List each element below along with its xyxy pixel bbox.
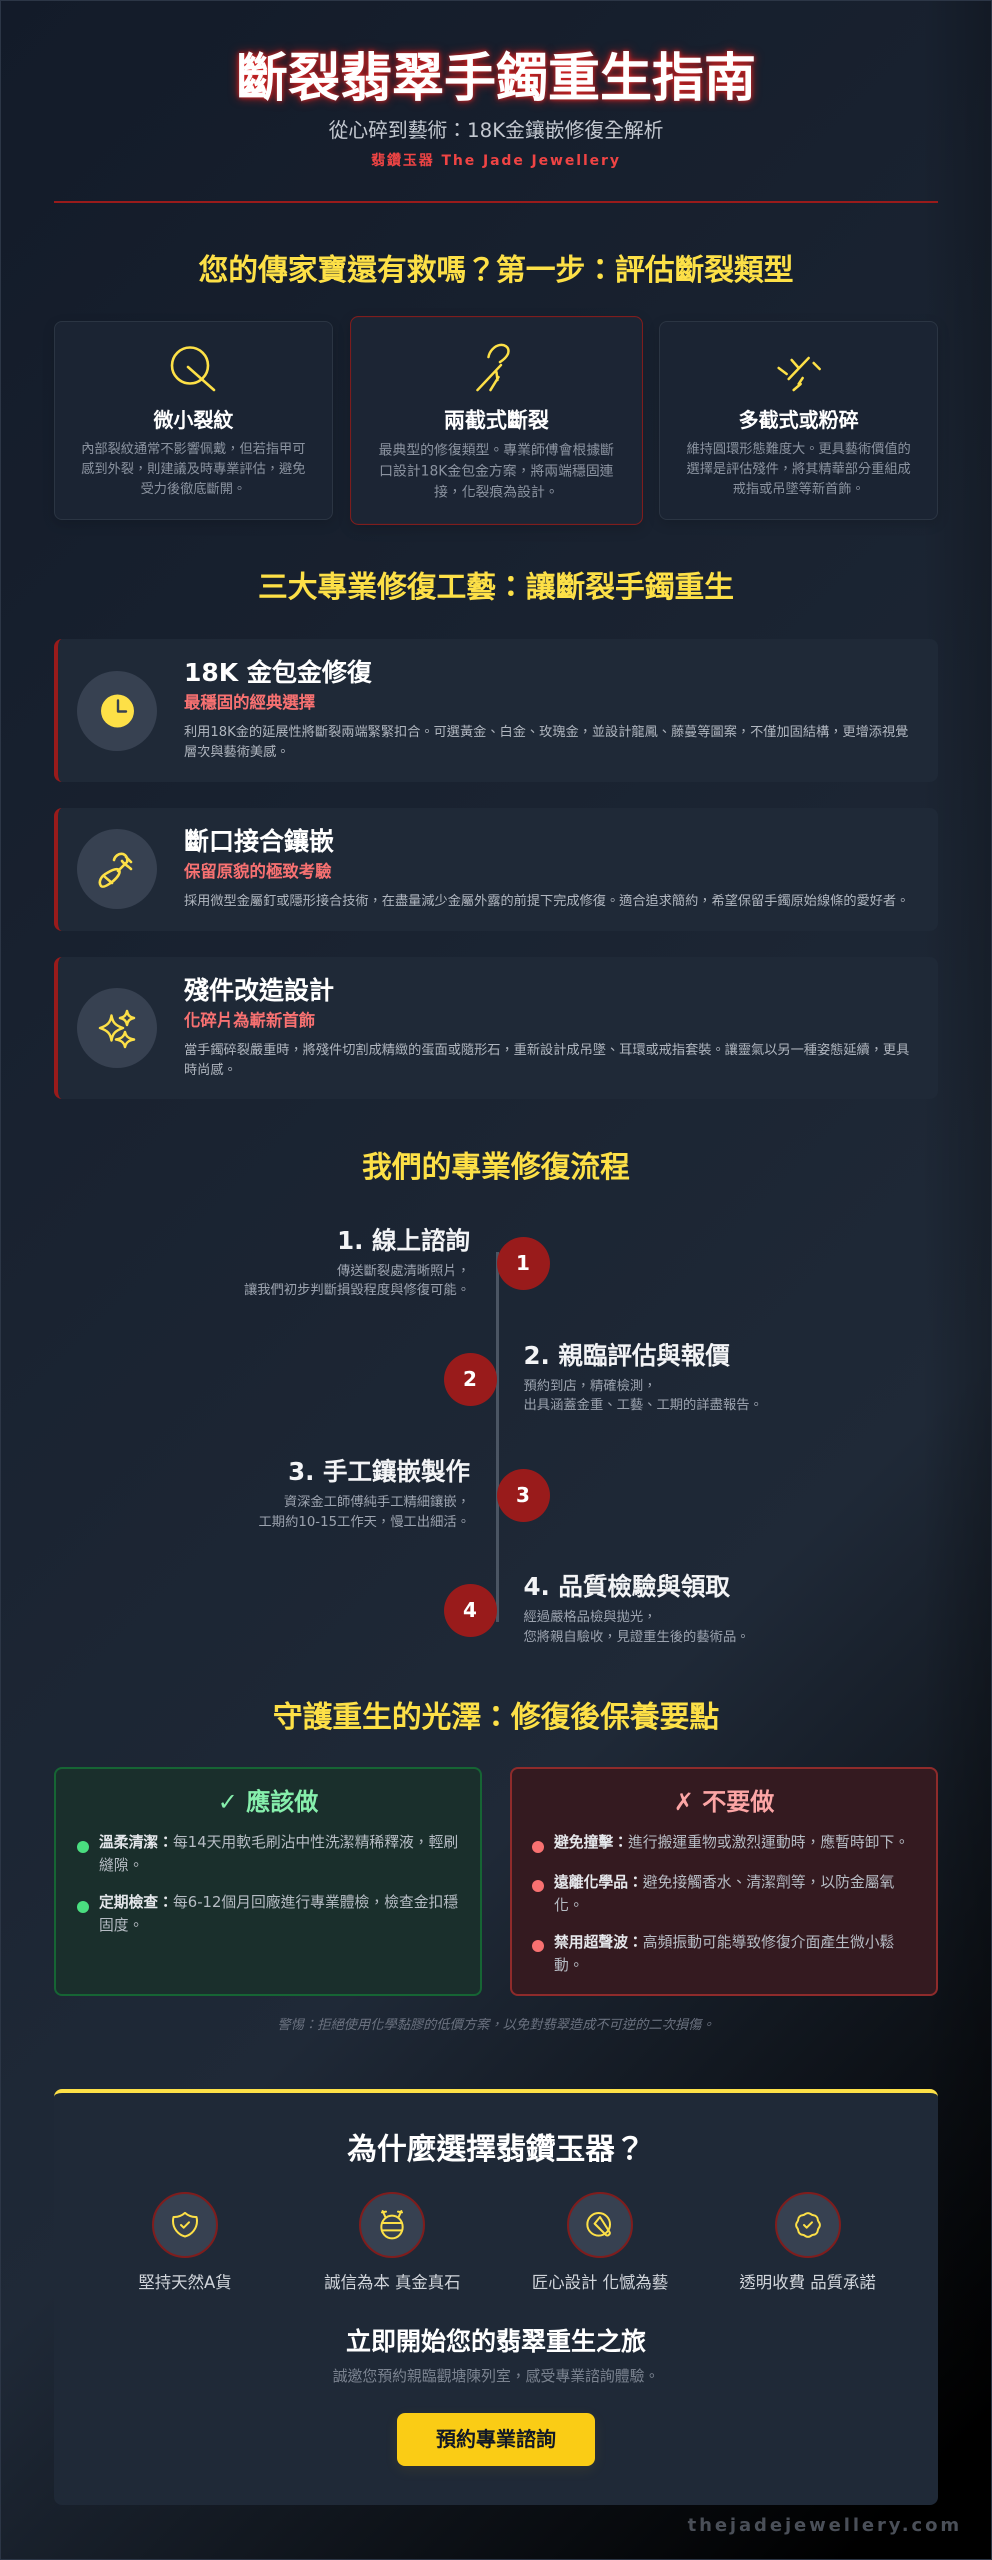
step 1 text: 讓我們初步判斷損毀程度與修復可能。: [244, 1283, 470, 1298]
panel: don't: [510, 1767, 938, 1996]
card description: 感到外裂，則建議及時專業評估，避免: [81, 462, 305, 477]
panel: remnant redesign: [54, 957, 938, 1099]
card description: [81, 442, 305, 497]
heading: process: 我們的專業修復流程: [362, 1150, 630, 1185]
CTA subtext: 誠邀您預約親臨觀塘陳列室，感受專業諮詢體驗。: [333, 2367, 659, 2385]
icon: barrel: [359, 2192, 425, 2258]
step 1 text: [244, 1226, 470, 1298]
technique tagline: 保留原貌的極致考驗: [184, 862, 332, 881]
do heading: ✓ 應該做: [218, 1788, 318, 1816]
icon: magnifier crack: [170, 346, 216, 392]
step 2 number: [444, 1353, 496, 1406]
header: [232, 45, 759, 169]
step 1 number: 1: [516, 1251, 530, 1275]
card title: 兩截式斷裂: [443, 407, 548, 433]
do bullet 2: [77, 1901, 89, 1913]
panel: minor crack: [54, 321, 333, 520]
subtitle: 從心碎到藝術：18K金鑲嵌修復全解析: [329, 119, 663, 142]
CTA button: [397, 2413, 595, 2466]
step 3 text: 3. 手工鑲嵌製作: [288, 1457, 470, 1486]
icon: shield: [152, 2192, 218, 2258]
technique description: 採用微型金屬釘或隱形接合技術，在盡量減少金屬外露的前提下完成修復。適合追求簡約，希望保留手鐲原始線條的愛好者。: [184, 894, 909, 909]
icon: shards: [777, 356, 821, 392]
heading: aftercare: 守護重生的光澤：修復後保養要點: [273, 1700, 719, 1735]
technique title: 殘件改造設計: [184, 976, 334, 1005]
step 2 text: 2. 親臨評估與報價: [524, 1340, 730, 1370]
card description: 受力後徹底斷開。: [141, 482, 246, 497]
panel: butt joint setting: [54, 808, 938, 931]
technique description: 層次與藝術美感。: [184, 745, 290, 760]
icon: broken link: [476, 344, 510, 392]
card description: 口設計18K金包金方案，將兩端穩固連: [379, 464, 613, 480]
do item 2: 固度。: [99, 1917, 143, 1934]
step 4 text: [524, 1572, 750, 1644]
do item 1: 溫柔清潔：每14天用軟毛刷沾中性洗潔精稀釋液，輕刷: [99, 1834, 458, 1851]
label: natural A-grade: 堅持天然A貨: [138, 2273, 232, 2292]
brand line: 翡鑽玉器 The Jade Jewellery: [371, 153, 621, 169]
technique description: [184, 724, 908, 760]
technique tagline: 最穩固的經典選擇: [184, 693, 315, 712]
technique title: 18K 金包金修復: [184, 658, 372, 687]
timeline axis: [496, 1252, 498, 1622]
label: transparent pricing: 透明收費 品質承諾: [739, 2273, 876, 2292]
step 3 number: 3: [516, 1482, 530, 1506]
don't item 3: 禁用超聲波：高頻振動可能導致修復介面產生微小鬆: [554, 1934, 894, 1951]
card description: [687, 442, 911, 497]
header divider: [54, 200, 938, 202]
step 2 text: 預約到店，精確檢測，: [524, 1378, 656, 1394]
card title: 微小裂紋: [153, 408, 233, 432]
technique description: 當手鐲碎裂嚴重時，將殘件切割成精緻的蛋面或隨形石，重新設計成吊墜、耳環或戒指套裝。讓靈氣以另一種姿態延續，更具: [184, 1043, 909, 1058]
don't item 2: [554, 1874, 894, 1914]
icon: chain link: [77, 829, 157, 909]
label: craftsmanship: 匠心設計 化憾為藝: [532, 2273, 668, 2292]
step 3 number: [496, 1468, 550, 1522]
icon: clock: [77, 671, 157, 751]
technique description: 時尚感。: [184, 1063, 237, 1078]
card description: [378, 442, 614, 501]
card description: 維持圓環形態難度大。更具藝術價值的: [687, 442, 911, 457]
don't bullet 2: [532, 1880, 544, 1892]
icon: badge: [775, 2192, 841, 2258]
icon: craft: [567, 2192, 633, 2258]
do bullet 1: [77, 1841, 89, 1853]
card description: 接，化裂痕為設計。: [434, 485, 558, 501]
footer watermark: thejadejewellery.com: [688, 2515, 962, 2536]
label: integrity: 誠信為本 真金真石: [324, 2273, 461, 2292]
warning note: 警惕：拒絕使用化學黏膠的低價方案，以免對翡翠造成不可逆的二次損傷。: [277, 2018, 715, 2033]
panel: two-piece break: [350, 316, 642, 525]
do item 1: [99, 1834, 458, 1874]
don't item 1: 避免撞擊：進行搬運重物或激烈運動時，應暫時卸下。: [554, 1834, 909, 1851]
timeline: [244, 1226, 763, 1644]
technique description: 利用18K金的延展性將斷裂兩端緊緊扣合。可選黃金、白金、玫瑰金，並設計龍鳳、藤蔓等圖案，不僅加固結構，更增添視覺: [184, 725, 908, 740]
step 4 number: 4: [463, 1598, 477, 1622]
step 1 text: 傳送斷裂處清晰照片，: [337, 1264, 470, 1278]
step 4 text: 4. 品質檢驗與領取: [524, 1572, 730, 1601]
technique description: [184, 1042, 909, 1078]
step 3 text: 資深金工師傅純手工精細鑲嵌，: [284, 1495, 470, 1510]
don't bullet 1: [532, 1841, 544, 1853]
don't heading: ✗ 不要做: [674, 1788, 774, 1816]
why heading: 為什麼選擇翡鑽玉器？: [347, 2132, 645, 2167]
step 1 number: [496, 1237, 550, 1290]
heading: three crafts: 三大專業修復工藝：讓斷裂手鐲重生: [258, 570, 734, 605]
panel: do: [54, 1767, 482, 1996]
CTA button: 預約專業諮詢: [436, 2427, 556, 2451]
do item 1: 縫隙。: [99, 1857, 143, 1874]
panel: why choose us and CTA: [54, 2089, 938, 2505]
do item 2: 定期檢查：每6-12個月回廠進行專業體檢，檢查金扣穩: [99, 1894, 458, 1911]
heading: assess fracture type: 您的傳家寶還有救嗎？第一步：評估斷裂類型: [198, 253, 794, 288]
card description: 選擇是評估殘件，將其精華部分重組成: [687, 462, 911, 477]
panel: shattered: [659, 321, 938, 520]
step 1 text: 1. 線上諮詢: [337, 1226, 470, 1254]
icon: sparkles: [77, 988, 157, 1068]
do item 2: [99, 1894, 458, 1934]
step 2 number: 2: [463, 1367, 477, 1391]
step 4 number: [444, 1584, 496, 1636]
technique title: 斷口接合鑲嵌: [184, 827, 334, 856]
card title: 多截式或粉碎: [739, 408, 859, 432]
step 2 text: 出具涵蓋金重、工藝、工期的詳盡報告。: [524, 1398, 763, 1413]
title: 斷裂翡翠手鐲重生指南: [236, 49, 756, 109]
step 2 text: [524, 1340, 763, 1413]
step 3 text: [258, 1457, 470, 1530]
don't item 2: 化。: [554, 1897, 584, 1914]
step 3 text: 工期約10-15工作天，慢工出細活。: [258, 1514, 470, 1530]
technique tagline: 化碎片為嶄新首飾: [184, 1011, 315, 1030]
panel: 18K wrap: [54, 639, 938, 782]
step 4 text: 您將親自驗收，見證重生後的藝術品。: [524, 1630, 750, 1644]
card description: 內部裂紋通常不影響佩戴，但若指甲可: [81, 442, 305, 457]
don't item 2: 遠離化學品：避免接觸香水、清潔劑等，以防金屬氧: [554, 1874, 894, 1891]
don't item 3: [554, 1934, 894, 1974]
step 4 text: 經過嚴格品檢與拋光，: [524, 1610, 656, 1625]
card description: 戒指或吊墜等新首飾。: [733, 482, 865, 497]
CTA heading: 立即開始您的翡翠重生之旅: [346, 2327, 646, 2356]
don't bullet 3: [532, 1940, 544, 1952]
don't item 3: 動。: [554, 1957, 584, 1974]
card description: 最典型的修復類型。專業師傅會根據斷: [378, 443, 614, 459]
